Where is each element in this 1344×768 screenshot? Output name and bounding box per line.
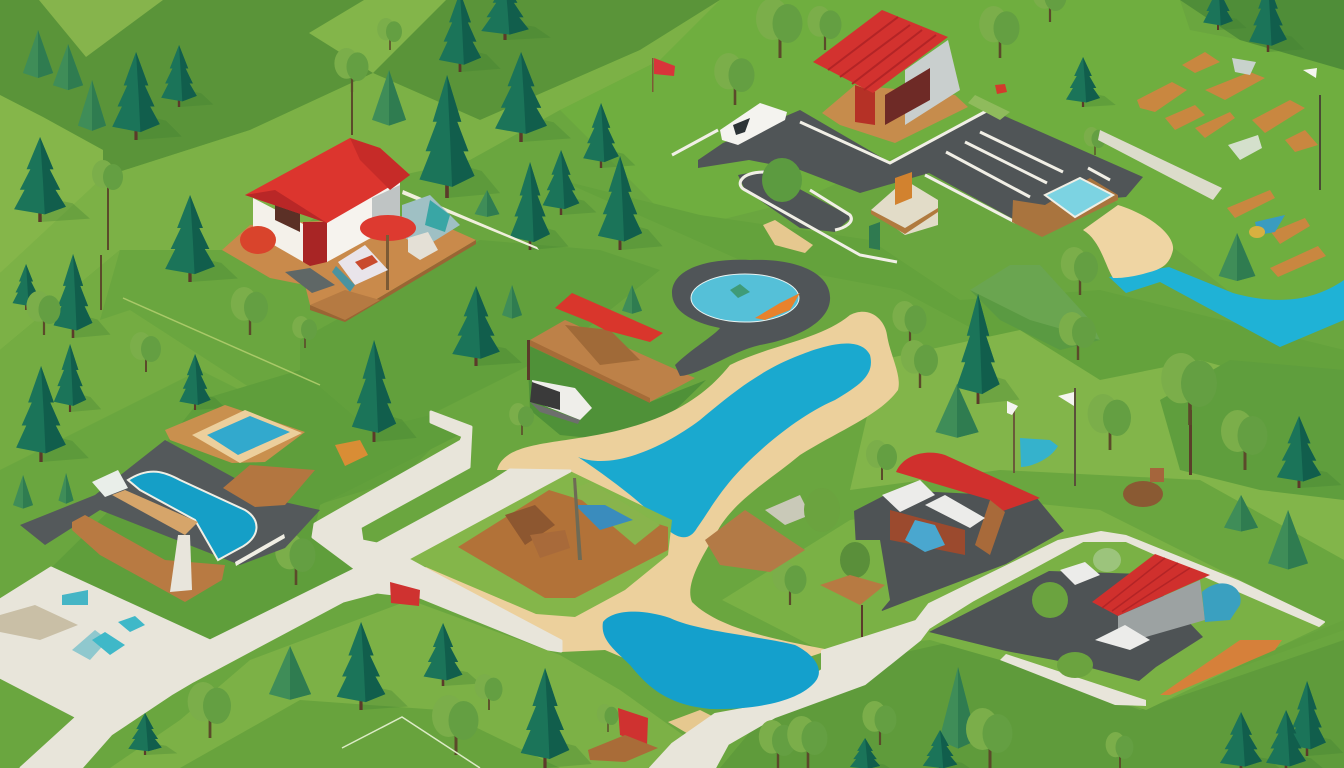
small pond right — [1020, 438, 1058, 467]
pool lawn — [51, 370, 461, 641]
pool — [1045, 178, 1113, 217]
boat — [92, 470, 128, 497]
bush top — [1093, 548, 1121, 572]
wood block — [223, 465, 315, 507]
pavilion floor — [530, 320, 695, 402]
red roof — [896, 453, 1040, 512]
main lake — [578, 343, 871, 537]
pond water — [691, 274, 799, 322]
fence line — [402, 190, 539, 250]
white plaza cabana — [0, 590, 145, 660]
river right — [1109, 267, 1344, 347]
roof — [245, 138, 410, 223]
fence posts — [527, 340, 530, 380]
wooden fence — [530, 340, 650, 403]
large pool — [128, 472, 256, 560]
grey patch — [765, 495, 810, 525]
flags and poles — [652, 58, 1321, 486]
island camp deck — [458, 478, 668, 598]
parasol left — [240, 226, 276, 254]
orange shrub — [335, 440, 368, 466]
parking white lines — [672, 108, 1110, 262]
parking: top — [672, 10, 1222, 278]
pool deck — [1012, 178, 1118, 237]
pavilion interior — [565, 325, 640, 365]
deck — [822, 85, 968, 143]
lower right field — [722, 500, 1325, 710]
van: centre — [530, 380, 592, 424]
building wall — [905, 40, 960, 125]
white canopy 1 — [882, 480, 935, 512]
sand patch — [1083, 205, 1173, 278]
orange boat — [755, 293, 800, 320]
campsite: right riverside hut — [705, 453, 1064, 637]
fence line bottom — [342, 717, 480, 768]
white lounge top — [1060, 562, 1100, 585]
lower lake — [603, 612, 819, 709]
asphalt — [929, 571, 1203, 681]
road right — [650, 532, 1324, 768]
grey wall — [1118, 580, 1205, 645]
lower wooden terrace — [72, 515, 225, 602]
patio — [402, 195, 460, 250]
roof — [813, 10, 948, 93]
green roundabout bush — [762, 158, 802, 202]
dark mat — [285, 268, 335, 293]
shelter: centre pavilion — [527, 293, 695, 403]
asphalt — [20, 440, 320, 565]
interior — [885, 68, 930, 125]
red roof — [1092, 554, 1210, 616]
storefront — [890, 510, 965, 555]
white line — [235, 534, 285, 566]
bed red pillow — [355, 255, 378, 270]
wood walkway — [968, 95, 1010, 120]
small sand patch — [668, 710, 712, 735]
deck — [222, 215, 476, 318]
window — [275, 198, 300, 232]
red door column — [855, 85, 875, 125]
deck lower edge — [310, 240, 476, 322]
pool complex: left — [20, 405, 368, 602]
stand deck — [871, 208, 938, 234]
pool deck top — [165, 405, 305, 463]
walkway — [112, 490, 198, 535]
parasol pole — [386, 235, 389, 290]
white chair — [408, 232, 438, 260]
campsite: lower right — [929, 548, 1282, 695]
grey panel — [372, 185, 400, 232]
right wall — [327, 180, 400, 262]
stand signage — [895, 172, 912, 205]
grass over asphalt — [850, 540, 890, 612]
tree stump — [1123, 468, 1164, 507]
planter box — [310, 290, 380, 320]
orange picnic wood — [1160, 640, 1282, 695]
lounge bed — [338, 245, 388, 285]
white roads — [0, 412, 570, 768]
grass around island — [407, 471, 672, 617]
pavilion roof — [555, 293, 663, 342]
sand beach around lake — [410, 312, 899, 665]
bushes — [804, 488, 840, 532]
top pool — [207, 416, 290, 455]
wall — [975, 500, 1005, 555]
bed blue base — [332, 266, 355, 292]
fence line left — [123, 298, 320, 385]
bush cluster — [1032, 582, 1068, 618]
small stand — [871, 180, 938, 235]
brown ground — [705, 510, 805, 572]
white stairs — [170, 535, 192, 592]
top pool border — [192, 410, 302, 463]
blue water feature — [905, 520, 945, 552]
picnic tables: top right — [1137, 52, 1326, 277]
stand dark hedge — [869, 222, 880, 250]
road spur — [1000, 654, 1146, 706]
red door wall — [303, 222, 327, 266]
house: top left campsite — [222, 138, 539, 322]
blue tube — [1202, 583, 1241, 622]
parasol — [360, 215, 416, 241]
pond with asphalt ring — [672, 260, 830, 376]
white van — [720, 103, 787, 145]
wood patch — [820, 575, 885, 605]
sand bit — [763, 220, 813, 253]
pond island — [730, 284, 750, 298]
white canopy 2 — [925, 495, 985, 528]
white lounge — [1095, 625, 1150, 650]
concrete strip — [1098, 130, 1222, 200]
asphalt — [854, 490, 1064, 611]
signs — [390, 582, 658, 762]
teal furniture — [425, 200, 450, 232]
left wall — [253, 198, 305, 263]
